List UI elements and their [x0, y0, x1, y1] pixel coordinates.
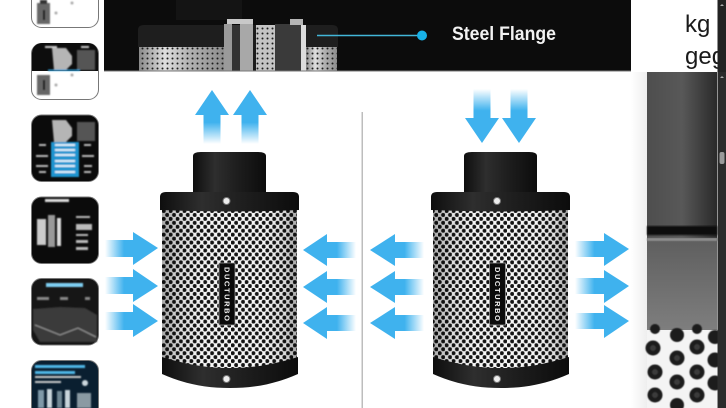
- thumbnail 6: carbon description: [32, 360, 98, 408]
- left filter: exhaust configuration: [105, 90, 356, 388]
- thumbnail 4: high quality build: [32, 197, 98, 264]
- top banner: steel flange: [104, 0, 631, 72]
- thumbnail 3: specifications table: [32, 115, 98, 182]
- right side panel fade: [631, 72, 647, 408]
- brand label: [490, 263, 506, 325]
- bottom band: [433, 357, 569, 388]
- arrows in from right: [303, 234, 356, 339]
- thumbnail 1: filter on white: [32, 0, 98, 28]
- partial text top right: kg: [685, 11, 710, 38]
- thumbnail 2: half dark, half white: [32, 43, 98, 100]
- arrows out to right: [575, 233, 629, 338]
- scrollbar: [718, 0, 726, 408]
- arrows out to left: [370, 234, 424, 339]
- thumbnail 5: filter close-up: [32, 278, 98, 345]
- arrows up: [195, 90, 267, 144]
- arrows down: [465, 89, 536, 143]
- top collar: [193, 152, 266, 194]
- top collar: [464, 152, 537, 194]
- thumbnail strip: [32, 0, 98, 408]
- mesh body: [433, 205, 568, 370]
- partial text top right: [685, 11, 725, 70]
- callout line and dot: [317, 30, 427, 40]
- arrows in from left: [105, 232, 158, 337]
- bottom band: [162, 357, 298, 388]
- filter cross-section: [138, 0, 338, 70]
- product photo close-up: dark section: [647, 72, 717, 330]
- divider: [362, 112, 363, 408]
- top flange: [431, 192, 570, 212]
- top flange: [160, 192, 299, 212]
- brand label: DUCTURBO: [222, 267, 232, 321]
- callout label: Steel Flange: [452, 23, 556, 45]
- brand label: [219, 263, 235, 325]
- product photo close-up: perforated mesh: [646, 324, 722, 408]
- partial text top right: geg: [685, 43, 725, 70]
- brand label: DUCTURBO: [493, 267, 502, 321]
- right filter: intake configuration: [370, 89, 629, 388]
- mesh body: [162, 205, 297, 370]
